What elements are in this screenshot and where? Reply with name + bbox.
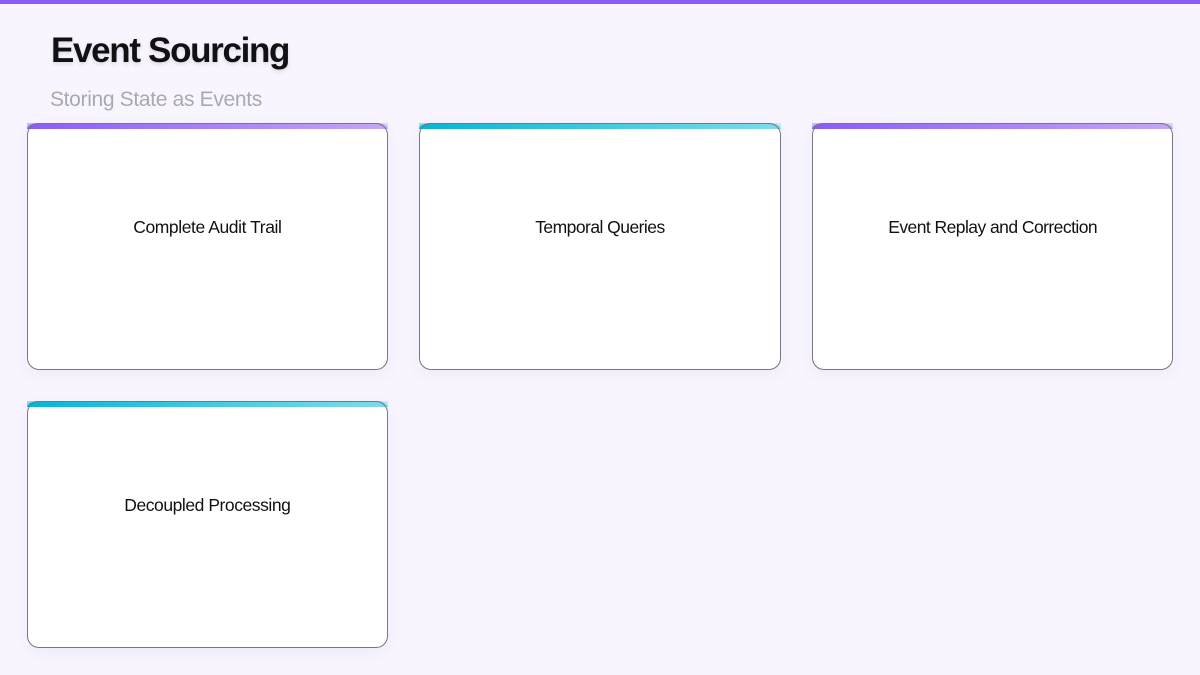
cyan accent corners <box>419 123 781 129</box>
purple card accent <box>812 123 1173 129</box>
card outline <box>27 123 388 370</box>
panel: Complete Audit Trail <box>27 123 388 370</box>
card label: Temporal Queries <box>535 217 665 237</box>
purple accent corners <box>27 123 388 129</box>
card label: Decoupled Processing <box>124 495 290 515</box>
card label: Complete Audit Trail <box>133 217 281 237</box>
subtitle: Storing State as Events <box>50 88 262 111</box>
panel: Event Replay and Correction <box>812 123 1173 370</box>
card label: Event Replay and Correction <box>888 217 1097 237</box>
cyan accent corners <box>27 401 388 407</box>
card outline <box>812 123 1173 370</box>
card outline <box>419 123 781 370</box>
title: Event Sourcing <box>51 31 289 70</box>
panel: Temporal Queries <box>419 123 781 370</box>
cyan card accent <box>419 123 781 129</box>
cyan card accent <box>27 401 388 407</box>
panel: Decoupled Processing <box>27 401 388 648</box>
purple card accent <box>27 123 388 129</box>
top accent bar <box>0 0 1200 4</box>
card outline <box>27 401 388 648</box>
purple accent corners <box>812 123 1173 129</box>
